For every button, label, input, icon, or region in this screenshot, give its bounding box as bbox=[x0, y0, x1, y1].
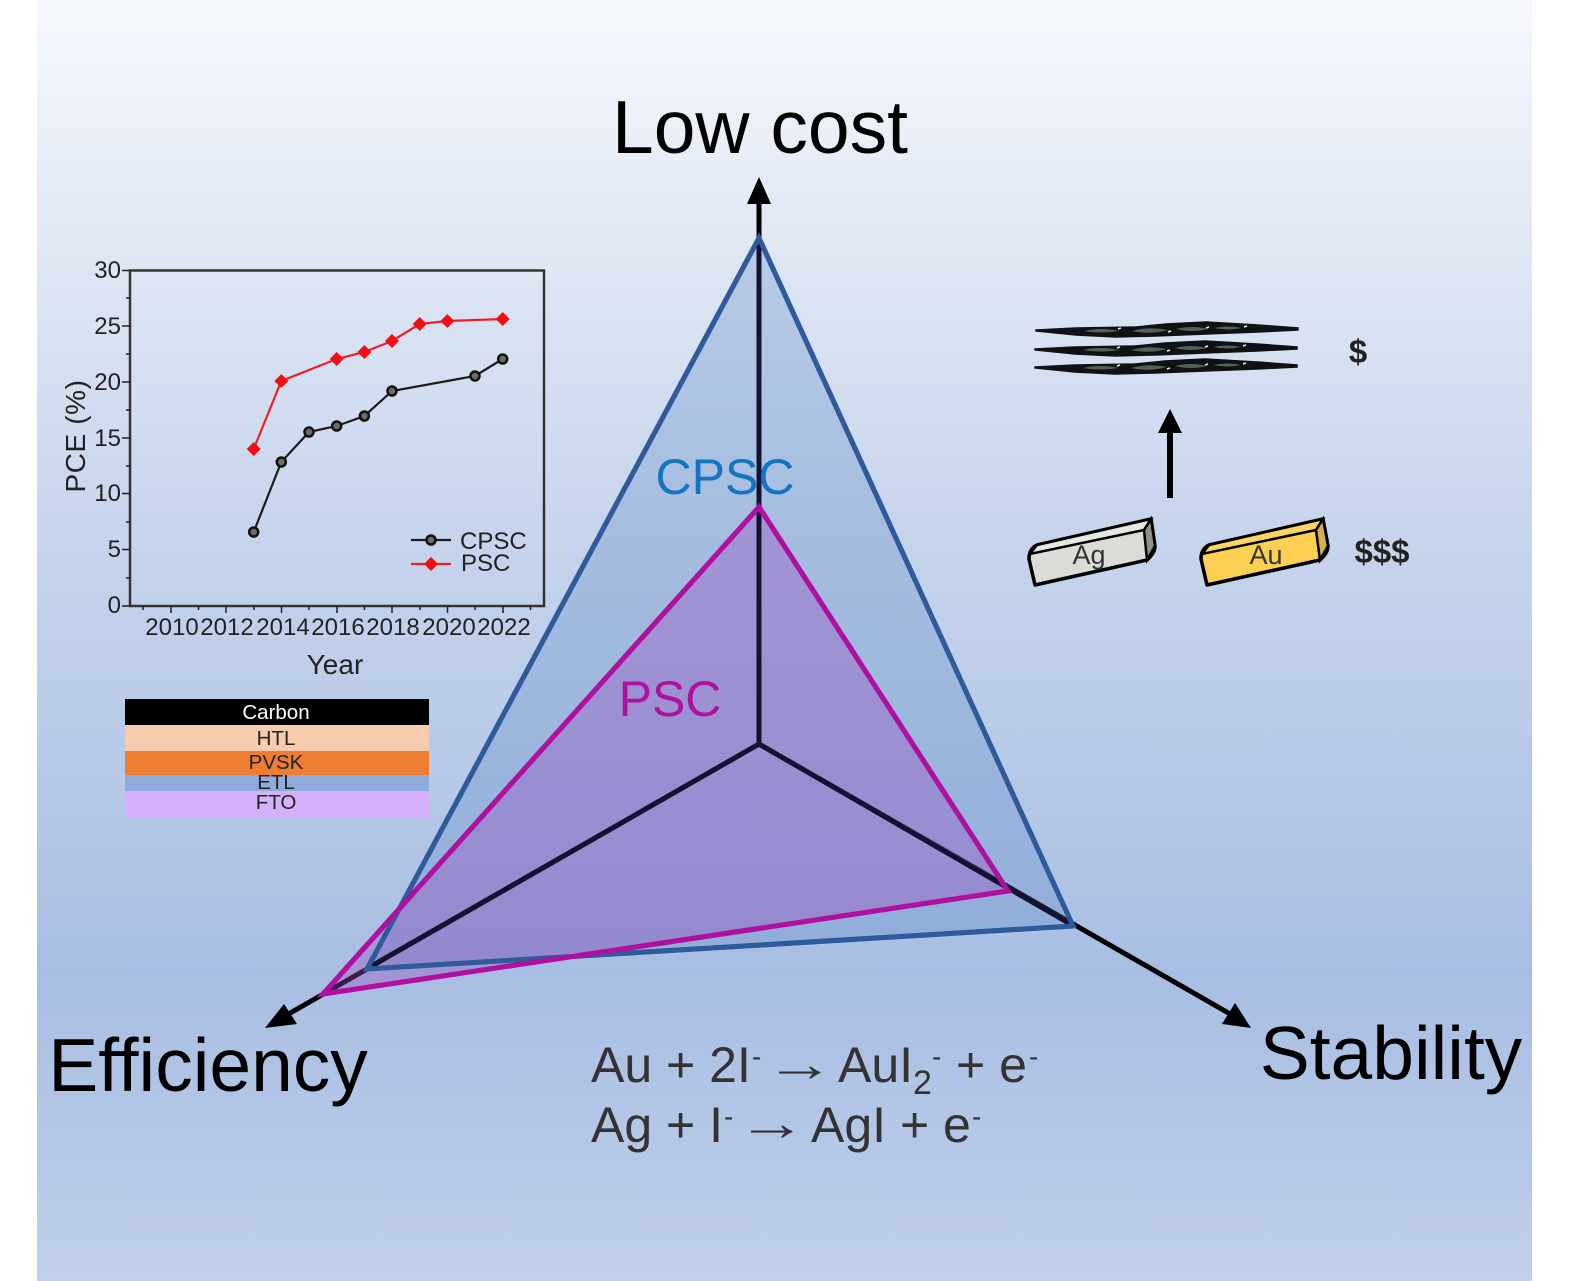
axis arrow: efficiency bbox=[265, 744, 759, 1028]
x axis tick labels: 2022 bbox=[477, 614, 531, 641]
equation: gold iodide: Au + 2I bbox=[591, 1037, 751, 1093]
equation: silver iodide: - bbox=[972, 1101, 981, 1132]
line chart: PCE by year bbox=[60, 257, 544, 680]
y axis tick labels: 30 bbox=[94, 257, 121, 284]
series: CPSC bbox=[249, 354, 507, 536]
cost label: $: $ bbox=[1349, 333, 1367, 370]
series label: CPSC: CPSC bbox=[656, 449, 794, 505]
y axis tick labels: 0 bbox=[108, 592, 121, 619]
equation: gold iodide: - bbox=[932, 1041, 941, 1072]
equation: gold iodide: - bbox=[1029, 1041, 1038, 1072]
x axis title: Year bbox=[307, 649, 363, 680]
series: PSC bbox=[247, 312, 510, 456]
legend: CPSC bbox=[460, 528, 527, 555]
y axis title: PCE (%) bbox=[60, 379, 91, 493]
x axis tick labels: 2012 bbox=[200, 614, 254, 641]
legend: PSC bbox=[461, 550, 510, 577]
layer: ETL bbox=[125, 771, 429, 794]
arrow: carbon replaces metal bbox=[1158, 409, 1182, 498]
layer: PVSK bbox=[125, 751, 429, 775]
equation: silver iodide bbox=[591, 1095, 981, 1153]
CPSC outline bbox=[367, 238, 1073, 969]
equation: silver iodide: - bbox=[724, 1101, 733, 1132]
y axis tick labels: 5 bbox=[108, 536, 121, 563]
y axis tick labels: 20 bbox=[94, 369, 121, 396]
cost label: $$$: $$$ bbox=[1354, 533, 1410, 570]
axis arrow: stability bbox=[759, 744, 1251, 1028]
y axis ticks bbox=[122, 270, 130, 606]
layer: Carbon bbox=[125, 699, 429, 725]
x axis tick labels bbox=[145, 614, 531, 641]
axis label: Stability: Stability bbox=[1260, 1011, 1523, 1095]
equation: silver iodide: AgI + e bbox=[811, 1097, 971, 1153]
inner axes tinted dark bbox=[368, 240, 1072, 968]
x axis tick labels: 2014 bbox=[256, 614, 310, 641]
icon: silver bar bbox=[1029, 519, 1155, 585]
icon: gold bar bbox=[1201, 519, 1328, 585]
icon: silver bar: Ag bbox=[1072, 540, 1106, 570]
device stack diagram bbox=[125, 699, 429, 817]
icon: gold bar: Au bbox=[1249, 540, 1283, 570]
equation: gold iodide bbox=[591, 1036, 1038, 1102]
equation: gold iodide: AuI bbox=[838, 1037, 913, 1093]
radar chart bbox=[265, 177, 1251, 1028]
x axis tick labels: 2020 bbox=[422, 614, 476, 641]
polygon: PSC bbox=[323, 507, 1008, 994]
axis label: Low cost: Low cost bbox=[612, 85, 908, 169]
layer: HTL bbox=[125, 725, 429, 751]
x axis ticks bbox=[143, 606, 530, 613]
layer: FTO bbox=[125, 791, 429, 817]
x axis tick labels: 2016 bbox=[311, 614, 365, 641]
equation: gold iodide: - bbox=[752, 1041, 761, 1072]
layer: FTO: FTO bbox=[256, 791, 296, 814]
layer: ETL: ETL bbox=[257, 771, 295, 794]
layer: Carbon: Carbon bbox=[242, 701, 310, 724]
axis arrow: low cost bbox=[747, 177, 771, 746]
x axis tick labels: 2018 bbox=[366, 614, 420, 641]
arrow glyph: gold reaction: → bbox=[765, 1036, 835, 1092]
axis label: Efficiency: Efficiency bbox=[48, 1023, 368, 1107]
arrow glyph: silver reaction: → bbox=[737, 1095, 807, 1151]
plot frame bbox=[130, 270, 544, 606]
equation: gold iodide: + e bbox=[956, 1037, 1027, 1093]
x axis tick labels: 2010 bbox=[145, 614, 199, 641]
PSC outline bbox=[323, 507, 1008, 994]
y axis tick labels bbox=[94, 257, 121, 619]
icon: graphite sheets bbox=[1035, 322, 1298, 374]
layer: PVSK: PVSK bbox=[249, 751, 304, 774]
polygon: CPSC bbox=[367, 238, 1073, 969]
equation: gold iodide: 2 bbox=[913, 1064, 932, 1102]
legend bbox=[411, 528, 527, 577]
y axis tick labels: 15 bbox=[94, 425, 121, 452]
equation: silver iodide: Ag + I bbox=[591, 1097, 723, 1153]
y axis tick labels: 10 bbox=[94, 480, 121, 507]
series label: PSC: PSC bbox=[619, 671, 721, 727]
layer: HTL: HTL bbox=[257, 727, 295, 750]
y axis tick labels: 25 bbox=[94, 313, 121, 340]
